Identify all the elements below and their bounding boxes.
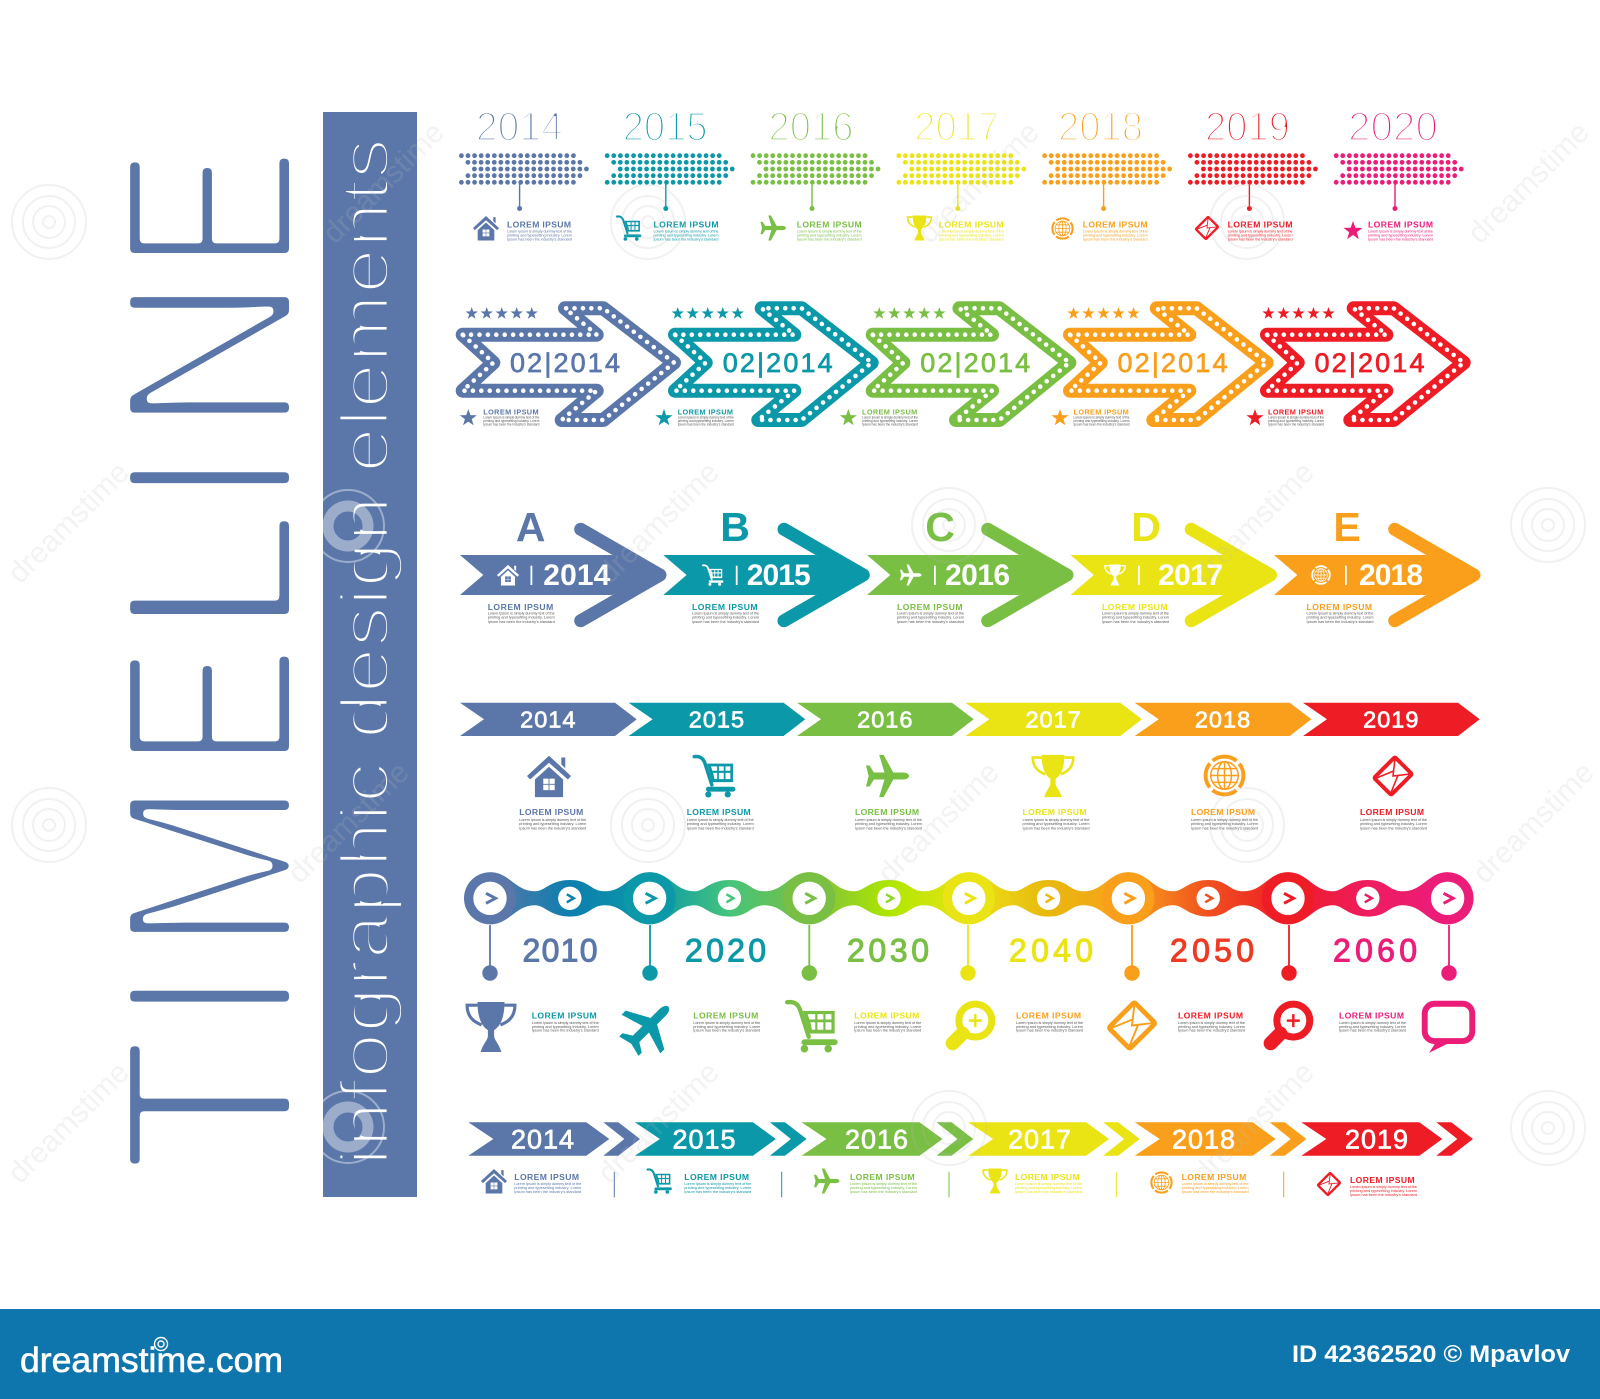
item 2050: printing and typesetting industry. Lorem: [1178, 1025, 1245, 1029]
item 2030: LOREM IPSUM: [854, 1010, 919, 1020]
item 2050: 2050: [1170, 933, 1254, 969]
step 2017: 2017: [914, 104, 999, 150]
double chevron 2015: printing and typesetting industry. Lorem: [684, 1186, 751, 1190]
arrow 2: printing and typesetting industry. Lorem: [678, 419, 734, 423]
arrow E: LOREM IPSUM: [1306, 602, 1372, 612]
item 2050: Ipsum has been the industry's standard: [1178, 1028, 1245, 1032]
arrow 4: [1051, 307, 1267, 426]
step 2020: printing and typesetting industry. Lorem: [1368, 233, 1433, 237]
double chevron 2014: Ipsum has been the industry's standard: [514, 1190, 581, 1194]
arrow B: LOREM IPSUM: [692, 602, 758, 612]
double chevron 2016: Ipsum has been the industry's standard: [850, 1190, 917, 1194]
item 2040: printing and typesetting industry. Lorem: [1016, 1025, 1083, 1029]
arrow D: [1070, 504, 1270, 624]
step 2020: [1336, 104, 1461, 241]
step 2014: [461, 104, 586, 241]
double chevron 2019: Ipsum has been the industry's standard: [1350, 1193, 1417, 1197]
double chevron 2015: LOREM IPSUM: [684, 1172, 749, 1182]
chevron 2018: [1135, 703, 1311, 830]
step 2015: LOREM IPSUM: [654, 219, 718, 229]
title: I: [73, 968, 346, 1024]
arrow 5: printing and typesetting industry. Lorem: [1268, 419, 1324, 423]
arrow 5: [1246, 307, 1464, 426]
item 2040: LOREM IPSUM: [1016, 1010, 1081, 1020]
item 2030: 2030: [847, 933, 929, 969]
item 2020: Ipsum has been the industry's standard: [693, 1028, 760, 1032]
item 2050: Lorem Ipsum is simply dummy text of the: [1178, 1021, 1245, 1025]
step 2015: Ipsum has been the industry's standard: [654, 237, 718, 241]
double chevron 2018: [1135, 1122, 1306, 1197]
arrow 1: Ipsum has been the industry's standard: [483, 422, 540, 426]
chain nodes: [464, 872, 1474, 924]
step 2020: 2020: [1348, 104, 1438, 150]
chevron 2018: 2018: [1195, 706, 1251, 732]
chevron 2019: Ipsum has been the industry's standard: [1360, 826, 1427, 830]
arrow 4: LOREM IPSUM: [1074, 407, 1129, 416]
item 2020: Lorem Ipsum is simply dummy text of the: [693, 1021, 760, 1025]
item 2030: Lorem Ipsum is simply dummy text of the: [854, 1021, 921, 1025]
item 2020: LOREM IPSUM: [693, 1010, 758, 1020]
chevron 2014: Ipsum has been the industry's standard: [519, 826, 586, 830]
double chevron 2019: 2019: [1345, 1124, 1409, 1154]
double chevron 2018: LOREM IPSUM: [1182, 1172, 1246, 1182]
arrow C: [867, 504, 1067, 624]
item 2040: 2040: [1009, 933, 1093, 969]
double chevron 2017: [968, 1122, 1140, 1197]
arrow E: Ipsum has been the industry's standard: [1306, 620, 1374, 624]
arrow 3: Ipsum has been the industry's standard: [862, 422, 918, 426]
item 2020: printing and typesetting industry. Lorem: [693, 1025, 760, 1029]
item 2010: 2010: [522, 933, 598, 969]
watermarks: dreamstime: [592, 1056, 726, 1190]
item 2040: Ipsum has been the industry's standard: [1016, 1028, 1083, 1032]
arrow 1: [460, 307, 674, 426]
footer bar: [0, 1309, 1600, 1399]
watermarks: dreamstime: [1462, 116, 1596, 250]
item 2030: [787, 925, 929, 1052]
arrow E: 2018: [1359, 559, 1423, 592]
chevron 2014: LOREM IPSUM: [519, 807, 583, 817]
chevron 2015: 2015: [689, 706, 745, 732]
chevron 2015: LOREM IPSUM: [687, 807, 751, 817]
subtitle text: infographic design elements: [326, 138, 404, 1166]
chevron 2017: 2017: [1025, 706, 1082, 732]
step 2017: Lorem Ipsum is simply dummy text of the: [939, 229, 1004, 233]
arrow 3: printing and typesetting industry. Lorem: [862, 419, 918, 423]
arrow D: Ipsum has been the industry's standard: [1102, 620, 1169, 624]
arrow D: 2017: [1158, 559, 1223, 592]
step 2017: printing and typesetting industry. Lorem: [939, 233, 1004, 237]
item 2010: [467, 925, 599, 1052]
chevron 2017: printing and typesetting industry. Lorem: [1022, 822, 1090, 826]
chevron 2018: LOREM IPSUM: [1191, 807, 1255, 817]
item 2060: 2060: [1333, 933, 1417, 969]
arrow 3: [840, 307, 1069, 426]
arrow 1: Lorem Ipsum is simply dummy text of the: [483, 416, 540, 420]
item 2010: printing and typesetting industry. Lorem: [532, 1025, 599, 1029]
arrow 3: Lorem Ipsum is simply dummy text of the: [862, 416, 918, 420]
double chevron 2017: printing and typesetting industry. Lorem: [1015, 1186, 1082, 1190]
chevron 2018: Lorem Ipsum is simply dummy text of the: [1191, 818, 1258, 822]
double chevron 2016: 2016: [845, 1124, 909, 1154]
arrow 3: 02|2014: [920, 348, 1030, 378]
step 2015: [607, 104, 732, 241]
step 2014: Ipsum has been the industry's standard: [507, 237, 572, 241]
watermarks: dreamstime: [912, 116, 1046, 250]
title: N: [73, 275, 346, 435]
arrow C: 2016: [945, 559, 1010, 592]
footer logo: dreamstime.com: [20, 1341, 283, 1380]
title: L: [74, 510, 346, 637]
section: lettered arrows: [460, 504, 1474, 624]
chevron 2017: LOREM IPSUM: [1022, 807, 1086, 817]
chevron 2014: 2014: [520, 706, 576, 732]
double chevron 2017: LOREM IPSUM: [1015, 1172, 1080, 1182]
arrow 4: Lorem Ipsum is simply dummy text of the: [1074, 416, 1130, 420]
item 2060: LOREM IPSUM: [1339, 1010, 1404, 1020]
watermarks: dreamstime: [1467, 756, 1600, 890]
chevron 2014: Lorem Ipsum is simply dummy text of the: [519, 818, 586, 822]
arrow B: 2015: [747, 559, 811, 592]
double chevron 2018: Ipsum has been the industry's standard: [1182, 1190, 1249, 1194]
double chevron 2015: [635, 1122, 807, 1197]
title: T: [74, 1037, 346, 1173]
chevron 2015: Lorem Ipsum is simply dummy text of the: [687, 818, 754, 822]
arrow E: Lorem Ipsum is simply dummy text of the: [1306, 612, 1374, 616]
double chevron 2018: printing and typesetting industry. Lorem: [1182, 1186, 1249, 1190]
step 2014: LOREM IPSUM: [507, 219, 571, 229]
chevron 2015: printing and typesetting industry. Lorem: [687, 822, 754, 826]
step 2015: 2015: [623, 104, 708, 150]
title: M: [74, 779, 346, 953]
step 2018: Ipsum has been the industry's standard: [1083, 237, 1148, 241]
item 2030: Ipsum has been the industry's standard: [854, 1028, 921, 1032]
step 2016: 2016: [768, 104, 854, 150]
item 2040: Lorem Ipsum is simply dummy text of the: [1016, 1021, 1083, 1025]
arrow B: Ipsum has been the industry's standard: [692, 620, 759, 624]
arrow C: Lorem Ipsum is simply dummy text of the: [897, 612, 964, 616]
arrow B: Lorem Ipsum is simply dummy text of the: [692, 612, 759, 616]
chevron 2019: [1303, 703, 1480, 830]
arrow D: D: [1131, 504, 1161, 550]
double chevron 2015: Lorem Ipsum is simply dummy text of the: [684, 1182, 751, 1186]
title: [73, 147, 346, 1173]
double chevron 2019: LOREM IPSUM: [1350, 1175, 1415, 1185]
arrow 2: LOREM IPSUM: [678, 407, 733, 416]
step 2019: Lorem Ipsum is simply dummy text of the: [1228, 229, 1293, 233]
chevron 2016: printing and typesetting industry. Lorem: [855, 822, 922, 826]
arrow A: printing and typesetting industry. Lorem: [488, 616, 555, 620]
double chevron 2014: 2014: [511, 1124, 575, 1154]
double chevron 2014: [468, 1122, 640, 1197]
item 2050: [1105, 925, 1254, 1052]
section: double chevron band: [468, 1122, 1473, 1197]
arrow A: 2014: [543, 559, 611, 592]
item 2020: [610, 925, 766, 1065]
title: E: [73, 645, 346, 770]
chevron 2019: LOREM IPSUM: [1360, 807, 1424, 817]
arrow 5: LOREM IPSUM: [1268, 407, 1323, 416]
arrow A: Lorem Ipsum is simply dummy text of the: [488, 612, 555, 616]
double chevron 2019: [1301, 1122, 1473, 1197]
item 2010: Ipsum has been the industry's standard: [532, 1028, 599, 1032]
step 2016: printing and typesetting industry. Lorem: [797, 233, 862, 237]
arrow 1: printing and typesetting industry. Lorem: [483, 419, 540, 423]
arrow 5: Ipsum has been the industry's standard: [1268, 422, 1324, 426]
step 2020: LOREM IPSUM: [1368, 219, 1433, 229]
arrow 2: [655, 307, 872, 426]
arrow D: Lorem Ipsum is simply dummy text of the: [1102, 612, 1169, 616]
step 2019: [1190, 104, 1316, 241]
arrow 5: 02|2014: [1314, 348, 1424, 378]
chevron 2014: [460, 703, 637, 830]
double chevron 2017: Lorem Ipsum is simply dummy text of the: [1015, 1182, 1082, 1186]
chevron 2016: [797, 703, 974, 830]
chevron 2018: printing and typesetting industry. Lorem: [1191, 822, 1258, 826]
arrow B: [663, 504, 863, 624]
item 2010: Lorem Ipsum is simply dummy text of the: [532, 1021, 599, 1025]
step 2019: 2019: [1205, 104, 1290, 150]
double chevron 2017: 2017: [1008, 1124, 1072, 1154]
section: chain timeline: [460, 870, 1480, 1065]
chevron 2016: Ipsum has been the industry's standard: [855, 826, 922, 830]
double chevron 2016: [802, 1122, 973, 1197]
watermarks: dreamstime: [317, 116, 451, 250]
step 2017: [899, 104, 1024, 241]
watermarks: dreamstime: [282, 756, 416, 890]
chevron 2017: Lorem Ipsum is simply dummy text of the: [1022, 818, 1090, 822]
step 2018: LOREM IPSUM: [1083, 219, 1148, 229]
arrow 5: Lorem Ipsum is simply dummy text of the: [1268, 416, 1324, 420]
title: I: [73, 450, 346, 506]
arrow C: Ipsum has been the industry's standard: [897, 620, 964, 624]
step 2015: Lorem Ipsum is simply dummy text of the: [654, 229, 718, 233]
watermarks: dreamstime: [872, 756, 1006, 890]
chevron 2019: printing and typesetting industry. Lorem: [1360, 822, 1427, 826]
item 2060: Ipsum has been the industry's standard: [1339, 1028, 1406, 1032]
section: dotted arrows: [461, 104, 1461, 241]
step 2016: Ipsum has been the industry's standard: [797, 237, 862, 241]
arrow A: A: [516, 504, 546, 550]
step 2018: 2018: [1058, 104, 1143, 150]
step 2018: Lorem Ipsum is simply dummy text of the: [1083, 229, 1148, 233]
chevron 2015: Ipsum has been the industry's standard: [687, 826, 754, 830]
step 2015: printing and typesetting industry. Lorem: [654, 233, 718, 237]
double chevron 2014: printing and typesetting industry. Lorem: [514, 1186, 581, 1190]
watermarks: dreamstime: [1187, 1056, 1321, 1190]
arrow C: printing and typesetting industry. Lorem: [897, 616, 964, 620]
chevron 2017: Ipsum has been the industry's standard: [1022, 826, 1090, 830]
double chevron 2014: Lorem Ipsum is simply dummy text of the: [514, 1182, 581, 1186]
arrow 4: 02|2014: [1118, 348, 1228, 378]
chevron 2016: Lorem Ipsum is simply dummy text of the: [855, 818, 922, 822]
arrow B: printing and typesetting industry. Lorem: [692, 616, 759, 620]
step 2018: printing and typesetting industry. Lorem: [1083, 233, 1148, 237]
step 2020: Lorem Ipsum is simply dummy text of the: [1368, 229, 1433, 233]
double chevron 2016: printing and typesetting industry. Lorem: [850, 1186, 917, 1190]
step 2017: LOREM IPSUM: [939, 219, 1004, 229]
chevron 2016: LOREM IPSUM: [855, 807, 919, 817]
chevron 2017: [965, 703, 1142, 830]
arrow 2: 02|2014: [723, 348, 833, 378]
double chevron 2014: LOREM IPSUM: [514, 1172, 579, 1182]
step 2019: Ipsum has been the industry's standard: [1228, 237, 1293, 241]
chevron 2018: Ipsum has been the industry's standard: [1191, 826, 1258, 830]
footer logo spiral: [154, 1338, 168, 1350]
double chevron 2018: Lorem Ipsum is simply dummy text of the: [1182, 1182, 1249, 1186]
item 2060: printing and typesetting industry. Lorem: [1339, 1025, 1406, 1029]
item final marker: [1425, 925, 1472, 1053]
step 2014: Lorem Ipsum is simply dummy text of the: [507, 229, 572, 233]
item 2010: LOREM IPSUM: [532, 1010, 597, 1020]
arrow 4: printing and typesetting industry. Lorem: [1074, 419, 1130, 423]
step 2016: LOREM IPSUM: [797, 219, 862, 229]
chevron 2019: 2019: [1363, 706, 1419, 732]
arrow 1: 02|2014: [510, 348, 620, 378]
footer credit: ID 42362520 © Mpavlov: [1292, 1341, 1571, 1368]
chain band: [490, 872, 1448, 924]
arrow A: [460, 504, 660, 624]
watermarks: dreamstime: [2, 1056, 136, 1190]
step 2016: Lorem Ipsum is simply dummy text of the: [797, 229, 862, 233]
double chevron 2016: LOREM IPSUM: [850, 1172, 915, 1182]
arrow 2: Lorem Ipsum is simply dummy text of the: [678, 416, 734, 420]
item 2020: 2020: [685, 933, 766, 969]
arrow B: B: [720, 504, 750, 550]
arrow D: LOREM IPSUM: [1102, 602, 1168, 612]
double chevron 2015: 2015: [672, 1124, 737, 1154]
step 2018: [1045, 104, 1170, 241]
step 2020: Ipsum has been the industry's standard: [1368, 237, 1433, 241]
step 2014: printing and typesetting industry. Lorem: [507, 233, 572, 237]
step 2019: printing and typesetting industry. Lorem: [1228, 233, 1293, 237]
title: E: [73, 147, 346, 272]
double chevron 2016: Lorem Ipsum is simply dummy text of the: [850, 1182, 917, 1186]
step 2017: Ipsum has been the industry's standard: [939, 237, 1004, 241]
step 2014: 2014: [476, 104, 563, 150]
watermarks: dreamstime: [592, 456, 726, 590]
item 2060: Lorem Ipsum is simply dummy text of the: [1339, 1021, 1406, 1025]
section: chevron band: [460, 703, 1480, 830]
arrow C: C: [925, 504, 955, 550]
double chevron 2018: 2018: [1172, 1124, 1236, 1154]
item 2050: LOREM IPSUM: [1178, 1010, 1243, 1020]
arrow 3: LOREM IPSUM: [862, 407, 917, 416]
item 2060: [1271, 925, 1417, 1043]
arrow 4: Ipsum has been the industry's standard: [1074, 422, 1130, 426]
watermarks: dreamstime: [2, 456, 136, 590]
arrow 2: Ipsum has been the industry's standard: [678, 422, 734, 426]
arrow E: [1274, 504, 1474, 624]
arrow 1: LOREM IPSUM: [483, 407, 539, 416]
step 2016: [753, 104, 878, 241]
arrow A: LOREM IPSUM: [488, 602, 553, 612]
section: outlined dotted arrows: [460, 307, 1464, 426]
chevron 2014: printing and typesetting industry. Lorem: [519, 822, 586, 826]
arrow A: Ipsum has been the industry's standard: [488, 620, 555, 624]
double chevron 2019: printing and typesetting industry. Lorem: [1350, 1189, 1417, 1193]
double chevron 2015: Ipsum has been the industry's standard: [684, 1190, 751, 1194]
item 2040: [953, 925, 1093, 1043]
watermarks: dreamstime: [1187, 456, 1321, 590]
chevron 2015: [629, 703, 805, 830]
panel: subtitle: [323, 112, 417, 1197]
watermarks: [2, 116, 1600, 1190]
step 2019: LOREM IPSUM: [1228, 219, 1293, 229]
double chevron 2019: Lorem Ipsum is simply dummy text of the: [1350, 1185, 1417, 1189]
arrow C: LOREM IPSUM: [897, 602, 963, 612]
chevron 2019: Lorem Ipsum is simply dummy text of the: [1360, 818, 1427, 822]
item 2030: printing and typesetting industry. Lorem: [854, 1025, 921, 1029]
arrow E: printing and typesetting industry. Lorem: [1306, 616, 1374, 620]
arrow D: printing and typesetting industry. Lorem: [1102, 616, 1169, 620]
double chevron 2017: Ipsum has been the industry's standard: [1015, 1190, 1082, 1194]
arrow E: E: [1333, 504, 1361, 550]
chevron 2016: 2016: [857, 706, 913, 732]
